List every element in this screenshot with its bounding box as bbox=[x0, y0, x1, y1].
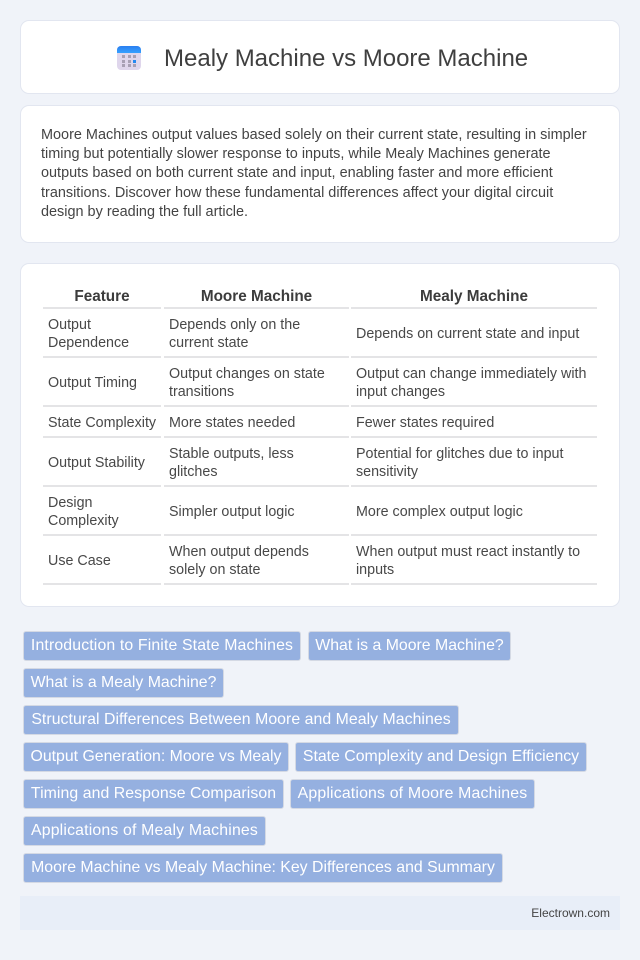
tag: State Complexity and Design Efficiency bbox=[303, 748, 579, 765]
title: Mealy Machine vs Moore Machine bbox=[164, 45, 528, 72]
row: output stability: sensitivity bbox=[356, 464, 418, 480]
intro text bbox=[41, 127, 587, 220]
tag bbox=[290, 779, 535, 809]
tag: What is a Moore Machine? bbox=[315, 637, 504, 654]
tag: Timing and Response Comparison bbox=[31, 785, 276, 802]
tag bbox=[23, 631, 301, 661]
intro text: transitions. Discover how these fundamental differences affect your digital circuit bbox=[41, 185, 553, 201]
row: output timing: input changes bbox=[356, 384, 445, 400]
tag bbox=[295, 742, 587, 772]
intro text: outputs based on both current state and input, enabling faster and more efficient bbox=[41, 165, 553, 181]
row: output dependence: Output bbox=[48, 317, 91, 333]
row: use case: Use Case bbox=[48, 553, 111, 569]
tag bbox=[23, 742, 289, 772]
row: output stability: glitches bbox=[169, 464, 217, 480]
row: output timing bbox=[48, 366, 586, 400]
tag bbox=[23, 705, 459, 735]
row: use case: inputs bbox=[356, 562, 394, 578]
row: output dependence: Depends only on the bbox=[169, 317, 300, 333]
row: state complexity: Fewer states required bbox=[356, 415, 494, 431]
tag: Structural Differences Between Moore and Mealy Machines bbox=[31, 711, 451, 728]
row: use case: When output must react instantly to bbox=[356, 544, 580, 560]
row: output timing: transitions bbox=[169, 384, 234, 400]
row: output timing: Output Timing bbox=[48, 375, 137, 391]
row: state complexity bbox=[48, 415, 494, 431]
row: output dependence: Dependence bbox=[48, 335, 129, 351]
row: output dependence bbox=[48, 317, 580, 351]
row: use case: solely on state bbox=[169, 562, 260, 578]
footer credit: Electrown.com bbox=[531, 906, 610, 920]
footer bbox=[20, 896, 620, 930]
section tags bbox=[23, 631, 587, 883]
row: design complexity: Complexity bbox=[48, 513, 119, 529]
row: output dependence: Depends on current state and input bbox=[356, 326, 579, 342]
tag: Moore Machine vs Mealy Machine: Key Differences and Summary bbox=[31, 859, 495, 876]
row: design complexity bbox=[48, 495, 523, 529]
row: state complexity: State Complexity bbox=[48, 415, 156, 431]
tag bbox=[23, 779, 284, 809]
comparison table bbox=[43, 288, 597, 585]
tag: Output Generation: Moore vs Mealy bbox=[30, 748, 281, 765]
row: output stability: Potential for glitches due to input bbox=[356, 446, 563, 462]
row: output dependence: current state bbox=[169, 335, 248, 351]
intro text: design by reading the full article. bbox=[41, 204, 248, 220]
row: use case: When output depends bbox=[169, 544, 309, 560]
row: output timing: Output changes on state bbox=[169, 366, 325, 382]
row: output timing: Output can change immediately with bbox=[356, 366, 586, 382]
row: output stability bbox=[48, 446, 564, 480]
tag bbox=[23, 668, 224, 698]
table header row: Mealy Machine bbox=[420, 288, 528, 305]
header card bbox=[20, 20, 620, 94]
tag: Applications of Mealy Machines bbox=[31, 822, 258, 839]
row: design complexity: Design bbox=[48, 495, 93, 511]
tag: Introduction to Finite State Machines bbox=[31, 637, 293, 654]
comparison table card bbox=[20, 263, 620, 607]
tag bbox=[308, 631, 511, 661]
row: design complexity: Simpler output logic bbox=[169, 504, 295, 520]
intro text: Moore Machines output values based solely on their current state, resulting in simpler bbox=[41, 127, 587, 143]
table header row: Moore Machine bbox=[201, 288, 312, 305]
row: design complexity: More complex output logic bbox=[356, 504, 523, 520]
row: output stability: Stable outputs, less bbox=[169, 446, 294, 462]
icon: calendar grid bbox=[117, 46, 141, 70]
row: output stability: Output Stability bbox=[48, 455, 145, 471]
tag bbox=[23, 853, 503, 883]
intro text: timing but potentially slower response to inputs, while Mealy Machines generate bbox=[41, 146, 551, 162]
table header row: Feature bbox=[74, 288, 130, 305]
tag bbox=[23, 816, 266, 846]
tag: Applications of Moore Machines bbox=[298, 785, 527, 802]
table header row bbox=[74, 288, 528, 305]
tag: What is a Mealy Machine? bbox=[31, 674, 216, 691]
row: use case bbox=[48, 544, 580, 578]
intro card bbox=[20, 105, 620, 243]
row: state complexity: More states needed bbox=[169, 415, 295, 431]
